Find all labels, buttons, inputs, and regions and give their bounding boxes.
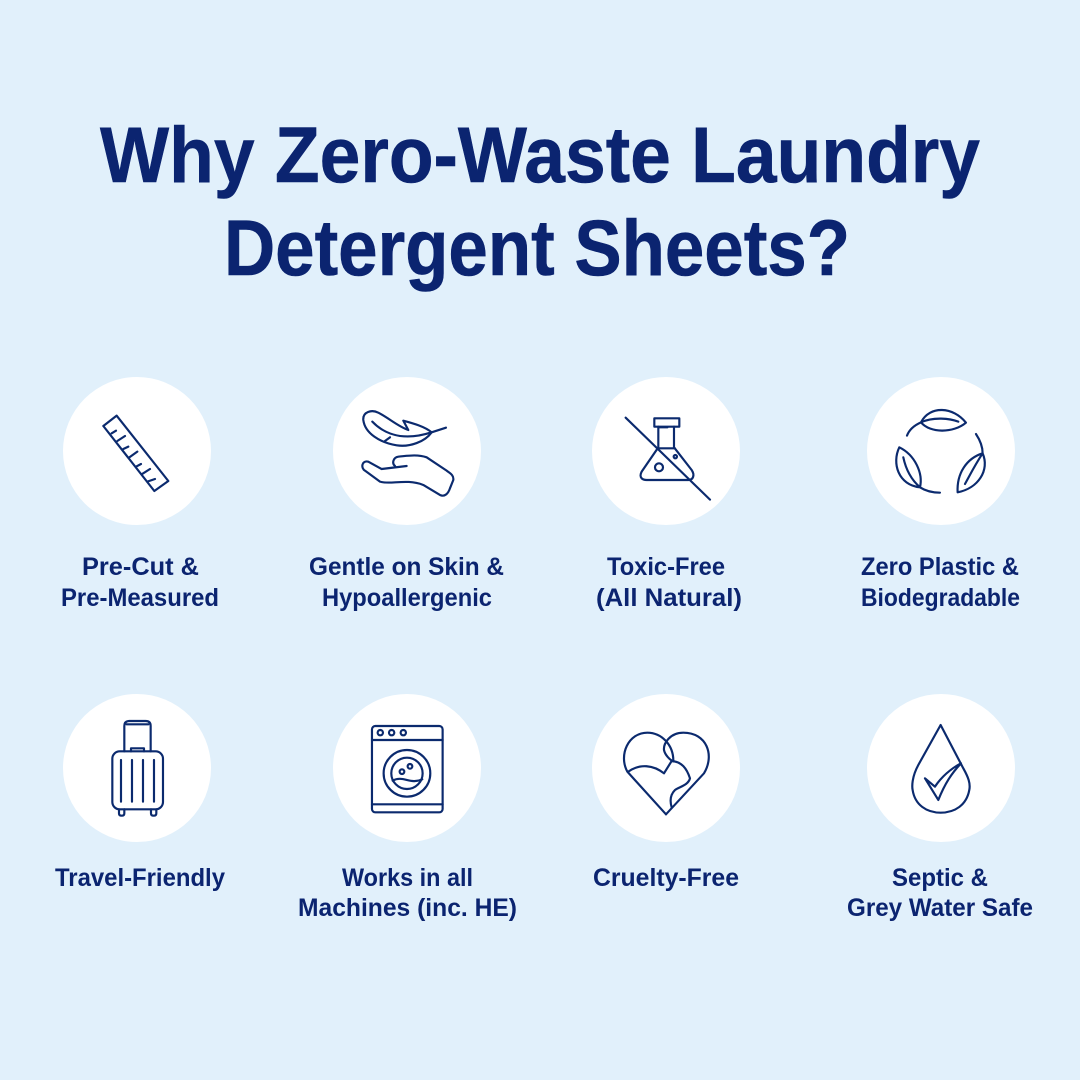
label: toxic-free: (All Natural) <box>596 584 742 612</box>
label: zero plastic: Zero Plastic & <box>861 553 1019 581</box>
panel: toxic-free <box>592 377 742 612</box>
icon: washing machine <box>372 726 443 812</box>
panel: travel-friendly <box>55 694 225 892</box>
label: gentle on skin: Hypoallergenic <box>322 584 492 612</box>
panel: zero plastic <box>861 377 1020 612</box>
label: travel-friendly: Travel-Friendly <box>55 864 225 892</box>
icon: water drop with check <box>912 725 970 813</box>
icon: crossed-out flask <box>626 418 710 500</box>
label: works in all machines: Works in all <box>342 864 473 892</box>
label: pre-cut <box>61 553 219 612</box>
label: pre-cut: Pre-Cut & <box>82 553 199 581</box>
label: septic and grey water safe: Septic & <box>892 864 988 892</box>
label: septic and grey water safe <box>847 864 1033 922</box>
icon: heart with rabbit <box>624 733 709 814</box>
label: works in all machines <box>298 864 517 922</box>
label: septic and grey water safe: Grey Water Safe <box>847 894 1033 922</box>
label: pre-cut: Pre-Measured <box>61 584 219 612</box>
icon: ruler <box>103 416 168 491</box>
label: toxic-free <box>596 553 742 612</box>
label: cruelty-free: Cruelty-Free <box>593 864 739 892</box>
label: works in all machines: Machines (inc. HE) <box>298 894 517 922</box>
label: toxic-free: Toxic-Free <box>607 553 725 581</box>
icon: suitcase <box>112 721 163 816</box>
label: gentle on skin <box>309 553 504 612</box>
panel: gentle on skin <box>309 377 504 612</box>
panel: cruelty-free <box>592 694 740 892</box>
label: zero plastic <box>861 553 1020 612</box>
panel: pre-cut and pre-measured <box>61 377 219 612</box>
label: gentle on skin: Gentle on Skin & <box>309 553 504 581</box>
icon: three leaves cycle <box>896 410 985 493</box>
title <box>100 110 980 292</box>
title: Why Zero-Waste Laundry <box>100 110 980 199</box>
panel: septic and grey water safe <box>847 694 1033 922</box>
title: Detergent Sheets? <box>224 203 850 292</box>
panel: works in all machines <box>298 694 517 922</box>
icon: feather and hand <box>362 411 453 496</box>
label: zero plastic: Biodegradable <box>861 584 1020 612</box>
